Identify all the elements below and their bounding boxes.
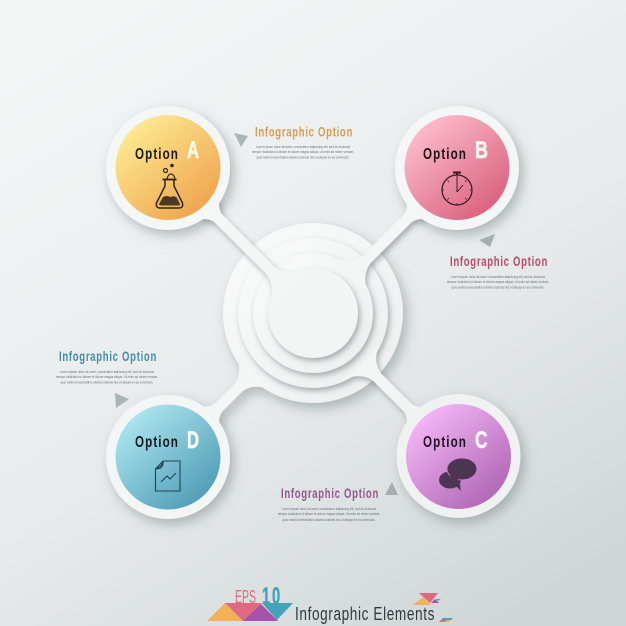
- footer logo: [207, 583, 453, 624]
- letter C: C: [475, 427, 488, 454]
- body: tempor incididunt ut labore et dolore magna aliqua. Ut enim ad minim veniam,: [278, 512, 380, 516]
- ring with arm to option B: [253, 192, 434, 373]
- panel: option D: [106, 387, 239, 519]
- panel: option C: [387, 387, 520, 518]
- body: quis nostrud exercitation ullamco laboris nisi ut aliquip ex ea commodo.: [256, 156, 350, 160]
- icon: stopwatch: [442, 172, 472, 205]
- version number: 10: [262, 583, 282, 610]
- body: Lorem ipsum dolor sit amet, consectetur adipiscing elit, sed do eiusmod: [282, 507, 376, 511]
- option D label: Option: [135, 434, 179, 451]
- body: Lorem ipsum dolor sit amet, consectetur adipiscing elit, sed do eiusmod: [60, 370, 154, 374]
- option C label: Option: [423, 434, 467, 451]
- center disc with arm to option A: [192, 192, 358, 358]
- small triangle mark: [413, 593, 453, 622]
- panel: option A: [106, 106, 239, 239]
- outer ring with arm to option D: [192, 223, 403, 434]
- arrow: [479, 234, 495, 247]
- arrow: [115, 393, 129, 408]
- letter B: B: [475, 137, 488, 164]
- icon: document with chart: [156, 461, 180, 491]
- heading: Infographic Option: [281, 486, 379, 501]
- icon: speech bubbles: [439, 458, 477, 491]
- body: [447, 275, 549, 290]
- body: tempor incididunt ut labore et dolore magna aliqua. Ut enim ad minim veniam,: [56, 375, 158, 379]
- text block: option D: [56, 349, 158, 408]
- text block: option B: [447, 234, 549, 290]
- icon: flask: [156, 164, 183, 208]
- body: [278, 507, 380, 522]
- heading: Infographic Option: [59, 349, 157, 364]
- body: Lorem ipsum dolor sit amet, consectetur adipiscing elit, sed do eiusmod: [451, 275, 545, 279]
- option B label: Option: [423, 146, 467, 163]
- body: quis nostrud exercitation ullamco laboris nisi ut aliquip ex ea commodo.: [452, 286, 544, 290]
- text block: option A: [234, 124, 354, 160]
- arrow: [385, 482, 398, 495]
- footer triangles: [207, 603, 293, 621]
- arrow: [234, 133, 248, 147]
- heading: Infographic Option: [450, 254, 548, 269]
- text block: option C: [278, 482, 398, 522]
- body: tempor incididunt ut labore et dolore magna aliqua. Ut enim ad minim veniam,: [447, 280, 549, 284]
- body: [56, 370, 158, 384]
- panel: option B: [387, 106, 519, 239]
- body: [252, 145, 354, 160]
- body: quis nostrud exercitation ullamco laboris nisi ut aliquip ex ea commodo.: [282, 518, 376, 522]
- letter D: D: [187, 427, 199, 454]
- option A label: Option: [135, 146, 179, 163]
- body: tempor incididunt ut labore et dolore magna aliqua. Ut enim ad minim veniam,: [252, 150, 354, 154]
- ring with arm to option C: [238, 238, 434, 434]
- body: Lorem ipsum dolor sit amet, consectetur adipiscing elit, sed do eiusmod: [256, 145, 350, 149]
- letter A: A: [187, 137, 199, 164]
- body: quis nostrud exercitation ullamco laboris nisi ut aliquip ex ea commodo.: [60, 380, 154, 384]
- EPS label: EPS: [235, 587, 256, 607]
- footer title: Infographic Elements: [295, 604, 435, 624]
- heading: Infographic Option: [255, 124, 353, 140]
